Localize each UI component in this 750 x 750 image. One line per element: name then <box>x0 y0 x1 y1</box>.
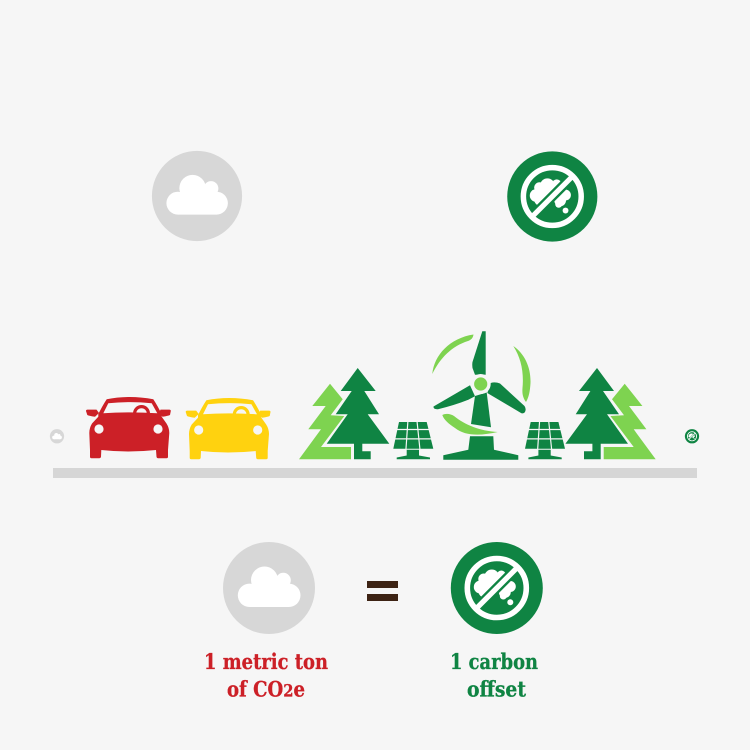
icon: offset badge (equation) <box>451 542 543 634</box>
icon: tiny offset badge <box>685 429 699 443</box>
icon: yellow car <box>186 398 270 459</box>
icon: left trees <box>299 368 389 459</box>
icon: red car <box>86 397 171 458</box>
label: 1 carbon offset <box>450 649 538 702</box>
icon: CO2 cloud (equation) <box>223 542 315 634</box>
label: 1 carbon offset: 1 carbon <box>450 649 538 674</box>
label: 1 metric ton of CO2e <box>204 649 328 702</box>
icon: equals sign <box>367 581 398 601</box>
icon: right solar panel <box>524 421 567 459</box>
ground line <box>53 468 697 478</box>
label: 1 metric ton of CO2e: 1 metric ton <box>204 649 328 674</box>
label: 1 metric ton of CO2e: of CO2e <box>227 677 305 702</box>
icon: CO2 cloud (top) <box>152 151 242 241</box>
icon: tiny CO2 cloud <box>50 429 64 443</box>
icon: wind turbine <box>432 331 531 460</box>
icon: right trees <box>565 368 656 459</box>
icon: no-carbon offset badge (top) <box>507 151 597 242</box>
label: 1 carbon offset: offset <box>467 677 526 702</box>
icon: left solar panel <box>392 421 435 459</box>
